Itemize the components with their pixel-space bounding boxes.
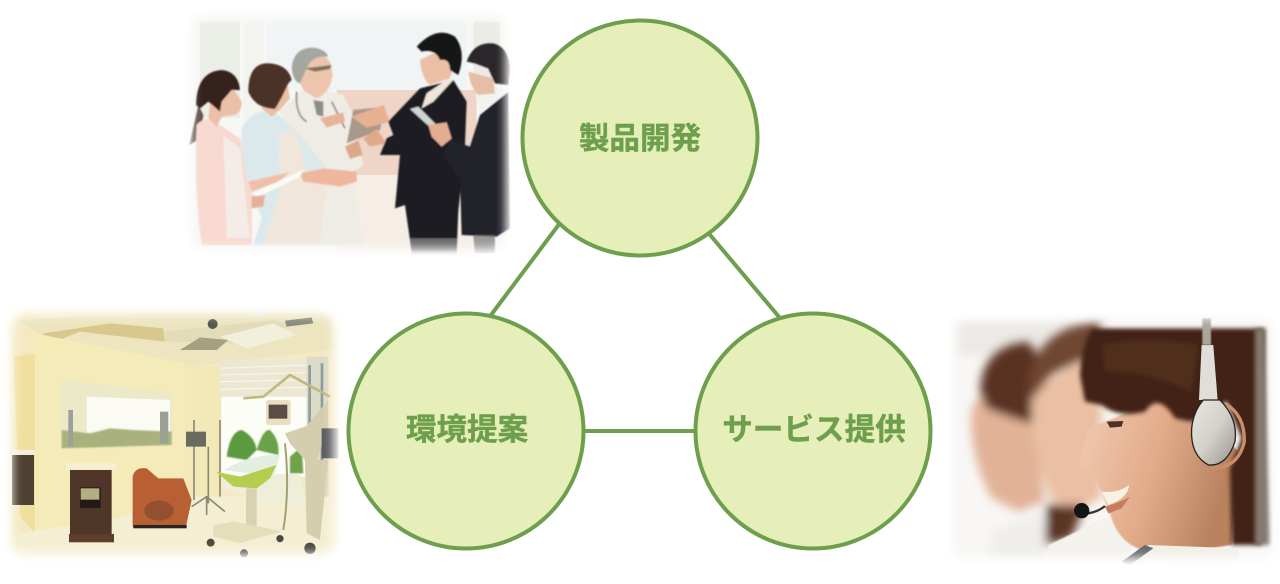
second businessman [459, 92, 510, 238]
photo: call centre operators with headsets [954, 316, 1273, 565]
circle: environment proposal [348, 314, 584, 548]
front woman [1096, 400, 1238, 550]
photo: care room showroom [0, 300, 345, 565]
back room [185, 367, 222, 500]
orange armchair [133, 468, 192, 527]
businessman with tablet [380, 80, 467, 252]
tablet and papers [252, 170, 303, 197]
crib and stand [223, 455, 280, 477]
garden [227, 430, 303, 473]
circle: product development: 製品開発 [579, 122, 701, 156]
floor [20, 496, 333, 553]
hands [320, 112, 345, 128]
doctor [280, 90, 364, 244]
blurred background colleagues [971, 322, 1102, 558]
woman in blue [241, 111, 327, 245]
circle: environment proposal: 環境提案 [406, 413, 529, 447]
woman in pink [199, 35, 201, 37]
headset [1199, 345, 1218, 400]
partition wall [35, 333, 185, 533]
circle: service provision: サービス提供 [722, 413, 906, 447]
collar [1142, 545, 1238, 557]
ceiling [22, 321, 327, 366]
photo: medical staff and business people meeting [188, 20, 510, 254]
iv stands [192, 420, 225, 515]
circle: service provision [696, 314, 930, 548]
connector lines [485, 219, 785, 431]
circle: product development [522, 20, 758, 256]
monitor arm [243, 375, 330, 398]
pellet stove cabinet [66, 463, 116, 470]
